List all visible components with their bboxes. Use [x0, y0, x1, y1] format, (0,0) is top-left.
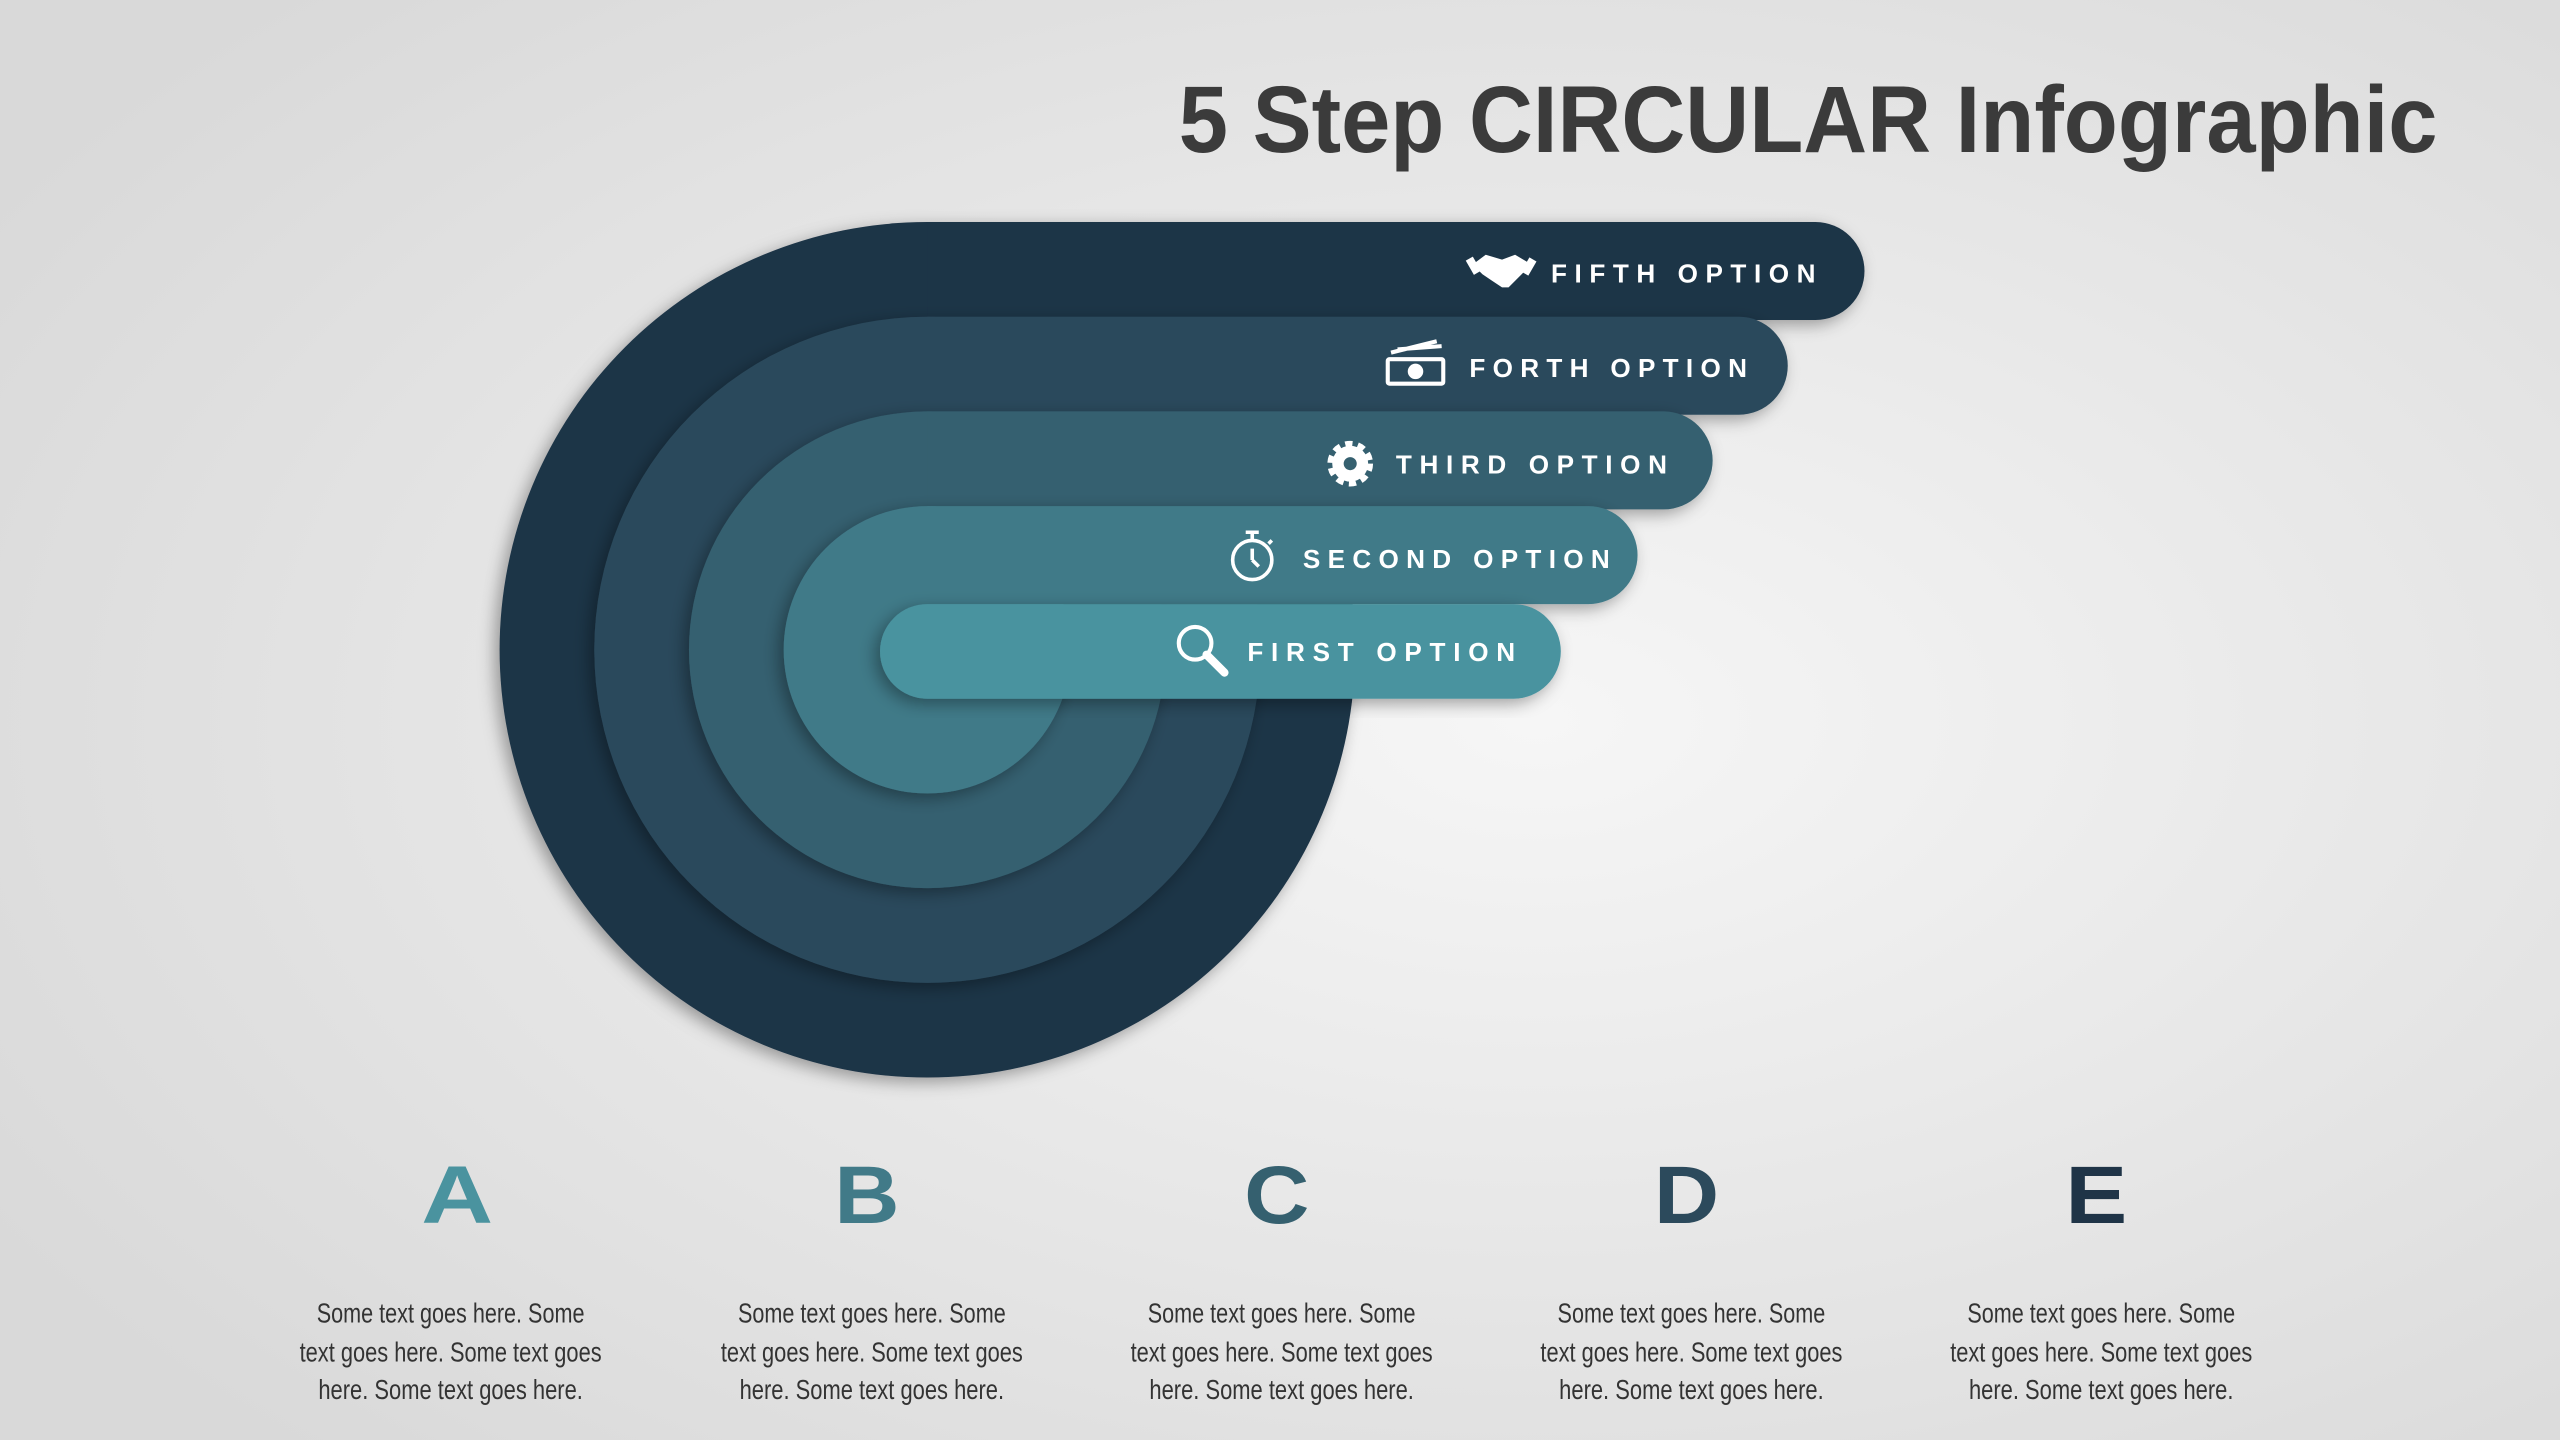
column A: Some text goes here. Some [317, 1297, 584, 1328]
column C: C [1244, 1150, 1309, 1241]
label: forth option: FORTH OPTION [1469, 353, 1747, 383]
column D: Some text goes here. Some [1558, 1297, 1825, 1328]
column D: text goes here. Some text goes [1540, 1337, 1842, 1368]
column C: text goes here. Some text goes [1131, 1337, 1433, 1368]
column E: Some text goes here. Some [1967, 1297, 2235, 1328]
column E [1950, 1150, 2252, 1405]
column A: text goes here. Some text goes [300, 1337, 602, 1368]
icon: money [1388, 341, 1443, 384]
label: fifth option: FIFTH OPTION [1551, 258, 1816, 288]
column B: here. Some text goes here. [740, 1374, 1004, 1405]
layer: third option [689, 411, 1713, 888]
column A: here. Some text goes here. [318, 1374, 583, 1405]
icon: stopwatch [1233, 532, 1272, 580]
layer: fifth option [500, 222, 1864, 1078]
column E: here. Some text goes here. [1969, 1374, 2233, 1405]
title: 5 Step CIRCULAR Infographic [1179, 67, 2438, 173]
column C: Some text goes here. Some [1148, 1297, 1416, 1328]
column C: here. Some text goes here. [1149, 1374, 1414, 1405]
column E: E [2065, 1150, 2127, 1241]
column B [721, 1150, 1023, 1405]
label: first option: FIRST OPTION [1247, 637, 1515, 667]
layer: first option [880, 604, 1561, 699]
icon: magnifier [1179, 627, 1224, 673]
label: third option: THIRD OPTION [1396, 449, 1667, 479]
column B: B [834, 1150, 900, 1241]
columns A-E [300, 1150, 2252, 1405]
column C [1131, 1150, 1433, 1405]
layer: forth option [594, 317, 1788, 983]
column B: Some text goes here. Some [738, 1297, 1006, 1328]
icon: handshake [1466, 255, 1536, 287]
column A [300, 1150, 602, 1405]
label: second option: SECOND OPTION [1303, 544, 1610, 574]
column A: A [421, 1150, 493, 1241]
column B: text goes here. Some text goes [721, 1337, 1023, 1368]
column E: text goes here. Some text goes [1950, 1337, 2252, 1368]
layer: second option [784, 506, 1638, 793]
diagram: circular steps [500, 222, 1864, 1078]
column D: here. Some text goes here. [1559, 1374, 1824, 1405]
column D: D [1654, 1150, 1719, 1241]
icon: gear [1332, 446, 1368, 482]
column D [1540, 1150, 1842, 1405]
